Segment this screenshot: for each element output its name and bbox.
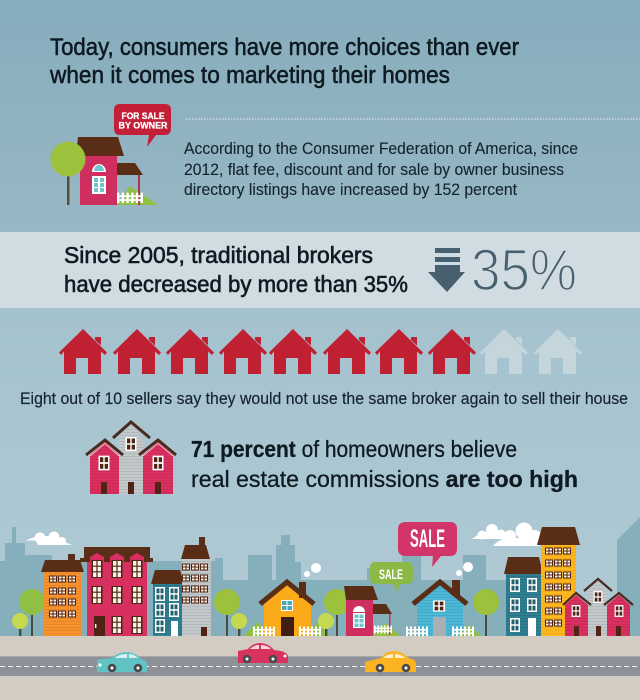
- building: small pink house: [344, 586, 401, 636]
- heading: brokers decreased: have decreased by more than 35%: [64, 271, 408, 297]
- car: red: [238, 643, 288, 663]
- building: teal house left: [151, 570, 184, 636]
- icon row: eight of ten houses: [59, 329, 582, 374]
- tree: mid pair: [318, 589, 350, 636]
- text: 71 percent of homeowners: [191, 436, 578, 492]
- smoke: [456, 562, 473, 576]
- building: blue cottage: [406, 562, 482, 636]
- illustration: clouds: [25, 522, 541, 546]
- illustration: city skyline: [0, 517, 640, 636]
- panel: traditional brokers band: [0, 232, 640, 308]
- car: teal: [97, 652, 147, 672]
- panel: top background: [0, 0, 640, 232]
- panel: lower background: [0, 308, 640, 700]
- cloud: right pair: [472, 522, 541, 546]
- window: [92, 164, 106, 194]
- text: 71 percent of homeowners: real estate commissions are too high: [191, 466, 578, 492]
- text block: Consumer Federation statistic: According to the Consumer Federation of America, since: [184, 139, 578, 158]
- tree: [50, 142, 86, 205]
- speech bubble: small sale: SALE: [379, 566, 403, 582]
- text: 71 percent of homeowners: 71 percent of homeowners believe: [191, 436, 517, 462]
- building: yellow tower: [537, 527, 580, 636]
- title: [49, 34, 519, 89]
- text block: Consumer Federation statistic: directory listings have increased by 152 percent: [184, 180, 517, 199]
- smoke: [304, 563, 321, 577]
- car: yellow: [365, 651, 416, 672]
- building: grey tower: [181, 537, 211, 636]
- heading: brokers decreased: Since 2005, traditional brokers: [64, 242, 373, 268]
- cloud: left: [25, 532, 72, 545]
- illustration: street: [0, 636, 640, 700]
- building: teal house right: [504, 557, 543, 636]
- speech bubble: small sale: [370, 562, 413, 592]
- building: orange apartments: [41, 554, 84, 636]
- tree: left pair: [12, 589, 45, 636]
- heading: brokers decreased: [64, 242, 408, 297]
- tree: centre pair: [214, 589, 247, 636]
- icon: down arrow: [428, 248, 465, 292]
- text block: Consumer Federation statistic: 2012, flat fee, discount and for sale by owner business: [184, 160, 564, 179]
- speech bubble: for sale by owner: [114, 104, 171, 147]
- title: Today, consumers have more choices than ever: [50, 34, 519, 61]
- building: orange cottage: [243, 563, 330, 636]
- speech bubble: for sale by owner: BY OWNER: [118, 120, 168, 130]
- text block: Consumer Federation statistic: [184, 139, 578, 199]
- title: when it comes to marketing their homes: [49, 62, 450, 89]
- speech bubble: large sale: SALE: [410, 525, 445, 553]
- text: eight out of 10 sellers: Eight out of 10 sellers say they would not use the same broker again to sell their house: [20, 390, 628, 408]
- building: crimson townhouse: [80, 547, 153, 636]
- tree: right: [473, 589, 499, 636]
- icon: for sale by owner house: [50, 104, 171, 205]
- speech bubble: for sale by owner: FOR SALE: [122, 111, 164, 121]
- speech bubble: large sale: [398, 522, 457, 567]
- figure: 35 percent: 35%: [471, 238, 577, 303]
- building: three small houses right: [563, 579, 633, 636]
- icon: three townhouses: [86, 422, 176, 494]
